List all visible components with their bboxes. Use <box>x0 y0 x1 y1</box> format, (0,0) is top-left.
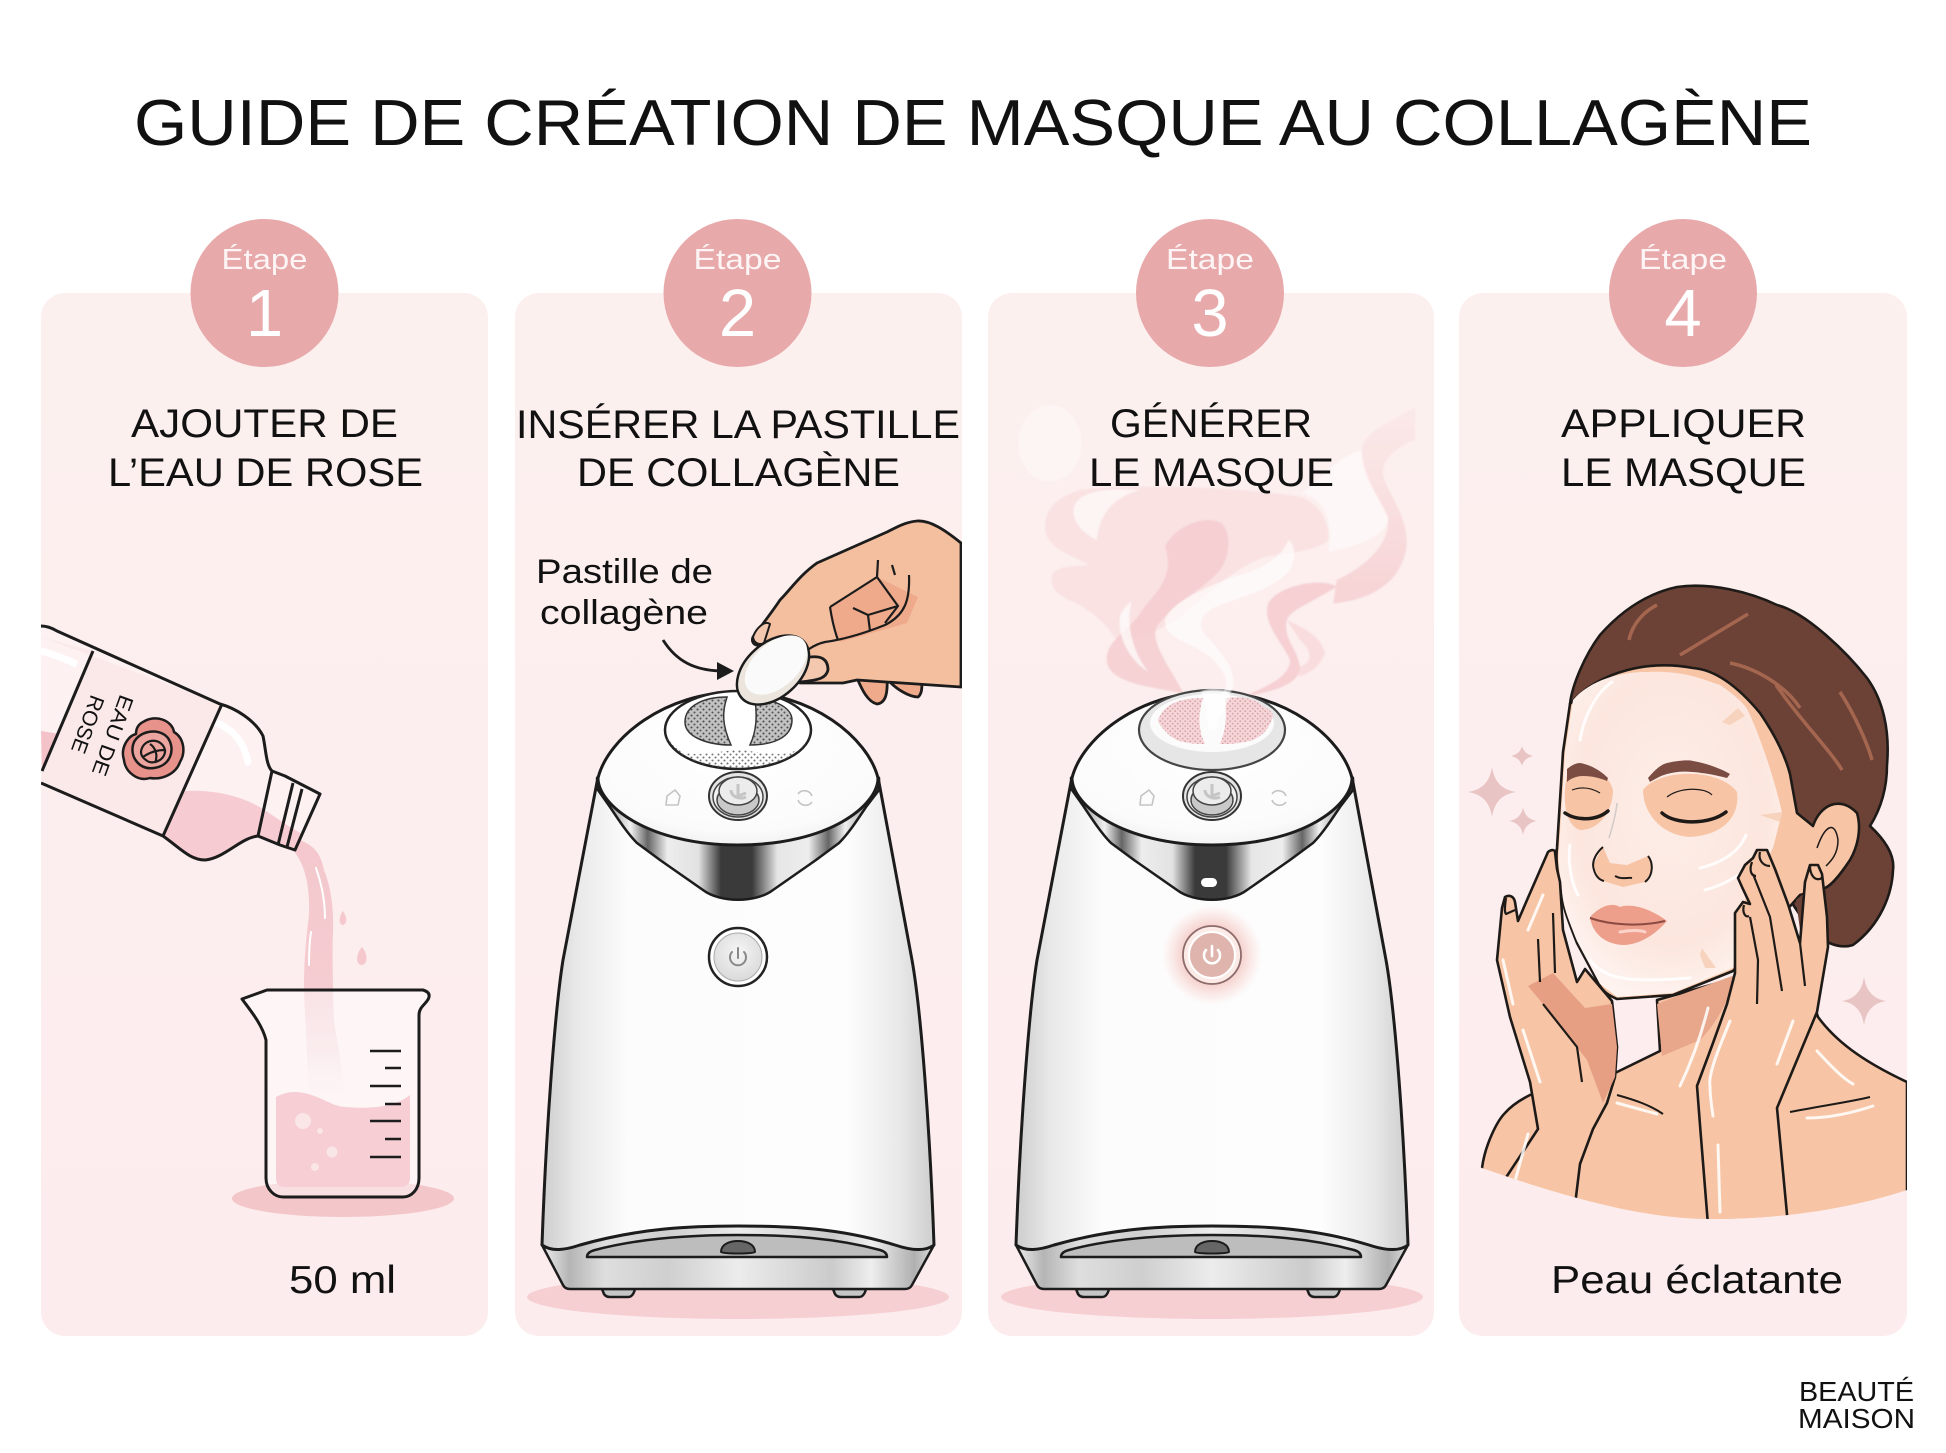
palm shadow <box>1528 973 1617 1103</box>
title: GUIDE DE CRÉATION DE MASQUE AU COLLAGÈNE <box>134 86 1812 159</box>
heading step 2: DE COLLAGÈNE <box>577 450 900 495</box>
rose logo <box>123 718 183 779</box>
heading step 3 <box>1089 401 1334 495</box>
panel: step 2 insert collagen tablet <box>515 219 962 1336</box>
panel background <box>515 293 962 1336</box>
device <box>1016 690 1408 1297</box>
device <box>542 691 934 1297</box>
heading step 4: APPLIQUER <box>1561 402 1806 446</box>
beaker <box>232 990 454 1217</box>
step badge 1 <box>190 219 338 367</box>
hand holding tablet <box>752 521 961 704</box>
panel background <box>988 293 1434 1336</box>
glowing power button <box>1162 905 1262 1005</box>
step badge 1: 1 <box>246 276 283 351</box>
face and ear <box>1556 665 1859 999</box>
eye openings <box>1564 776 1613 830</box>
nose tip <box>1593 847 1653 887</box>
tablet callout label <box>536 553 713 632</box>
collarbones <box>1617 1095 1870 1114</box>
heading step 4: LE MASQUE <box>1561 451 1806 495</box>
panel background <box>41 293 488 1336</box>
shadow under device <box>1001 1275 1423 1319</box>
heading step 3: LE MASQUE <box>1089 451 1334 495</box>
panel: step 3 generate mask <box>988 219 1434 1336</box>
bottle label text: ROSE <box>66 692 108 756</box>
woman applying mask <box>1482 586 1907 1230</box>
caption 50 ml: 50 ml <box>289 1259 396 1302</box>
hair highlights <box>1629 605 1872 770</box>
white steam in front <box>1165 540 1294 730</box>
step badge 1: Étape <box>222 243 308 276</box>
neck hair patch <box>1796 894 1803 930</box>
bottle label text <box>71 695 134 776</box>
heading step 1: L’EAU DE ROSE <box>108 451 423 495</box>
tablet callout label: Pastille de <box>536 553 713 591</box>
shoulders <box>1480 982 1907 1219</box>
pouring stream <box>294 840 366 1054</box>
lips <box>1590 905 1667 945</box>
heading step 2 <box>516 402 960 495</box>
steam behind device <box>1018 405 1415 695</box>
brand logo: BEAUTÉ <box>1799 1376 1914 1407</box>
hair <box>1570 586 1893 946</box>
brand logo: MAISON <box>1798 1403 1915 1434</box>
mask slits <box>1700 708 1782 968</box>
step badge 3 <box>1136 219 1284 367</box>
caption peau eclatante: Peau éclatante <box>1551 1259 1843 1302</box>
shadow under device <box>527 1275 949 1319</box>
collagen tablet <box>724 622 822 718</box>
right hand <box>1697 850 1828 1225</box>
closed eyes <box>1565 811 1726 822</box>
sheet mask <box>1558 672 1782 997</box>
panel: step 4 apply mask <box>1459 219 1907 1336</box>
eyebrows <box>1567 763 1608 782</box>
status LED <box>1201 878 1217 887</box>
bottle <box>41 626 320 860</box>
heading step 4 <box>1561 402 1806 495</box>
arrow to device <box>663 640 734 680</box>
bottle label text: EAU DE <box>87 692 137 779</box>
step badge 4: 4 <box>1664 276 1702 351</box>
power button <box>709 928 767 986</box>
step badge 4: Étape <box>1639 243 1727 276</box>
heading step 3: GÉNÉRER <box>1110 401 1312 446</box>
step badge 3: 3 <box>1191 276 1229 351</box>
step badge 2: 2 <box>719 276 756 351</box>
sparkles <box>1468 746 1886 1025</box>
mask highlights <box>1569 682 1755 980</box>
heading step 1: AJOUTER DE <box>131 402 398 446</box>
brand logo <box>1798 1376 1915 1434</box>
heading step 2: INSÉRER LA PASTILLE <box>516 402 960 447</box>
step badge 3: Étape <box>1166 243 1254 276</box>
tablet callout label: collagène <box>540 594 708 632</box>
panel: step 1 add rose water <box>41 219 488 1336</box>
step badge 2 <box>664 219 812 367</box>
heading step 1 <box>108 402 423 495</box>
panel background <box>1459 293 1907 1336</box>
left hand <box>1497 850 1617 1205</box>
step badge 4 <box>1609 219 1757 367</box>
skin shine <box>1503 895 1873 1212</box>
top disc glowing pink <box>1139 690 1285 770</box>
neck shadow <box>1657 975 1735 1056</box>
step badge 2: Étape <box>694 243 782 276</box>
top disc with perforations <box>665 691 811 769</box>
